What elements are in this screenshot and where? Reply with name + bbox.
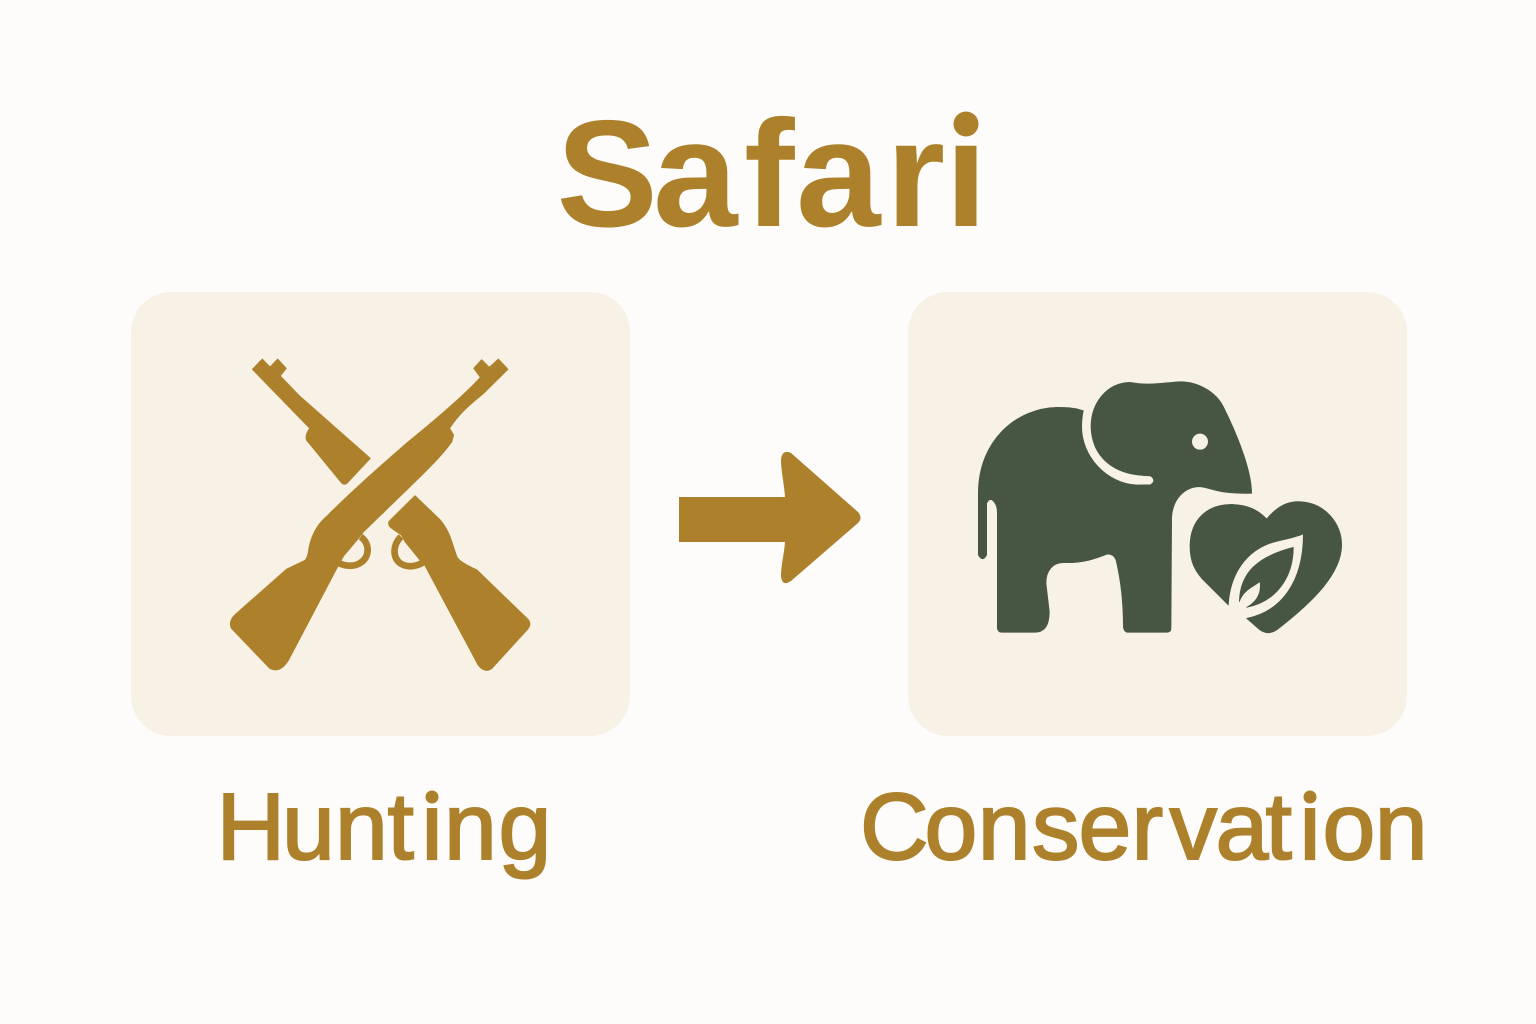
panel: conservation <box>908 292 1407 736</box>
icon: crossed rifles <box>231 359 530 670</box>
title: Safari <box>556 89 987 259</box>
label: hunting: Hunting <box>216 774 551 880</box>
label: conservation: Conservation <box>860 774 1428 880</box>
icon: elephant with heart and leaf <box>978 382 1342 633</box>
arrow <box>679 452 860 583</box>
panel: hunting <box>131 292 630 736</box>
